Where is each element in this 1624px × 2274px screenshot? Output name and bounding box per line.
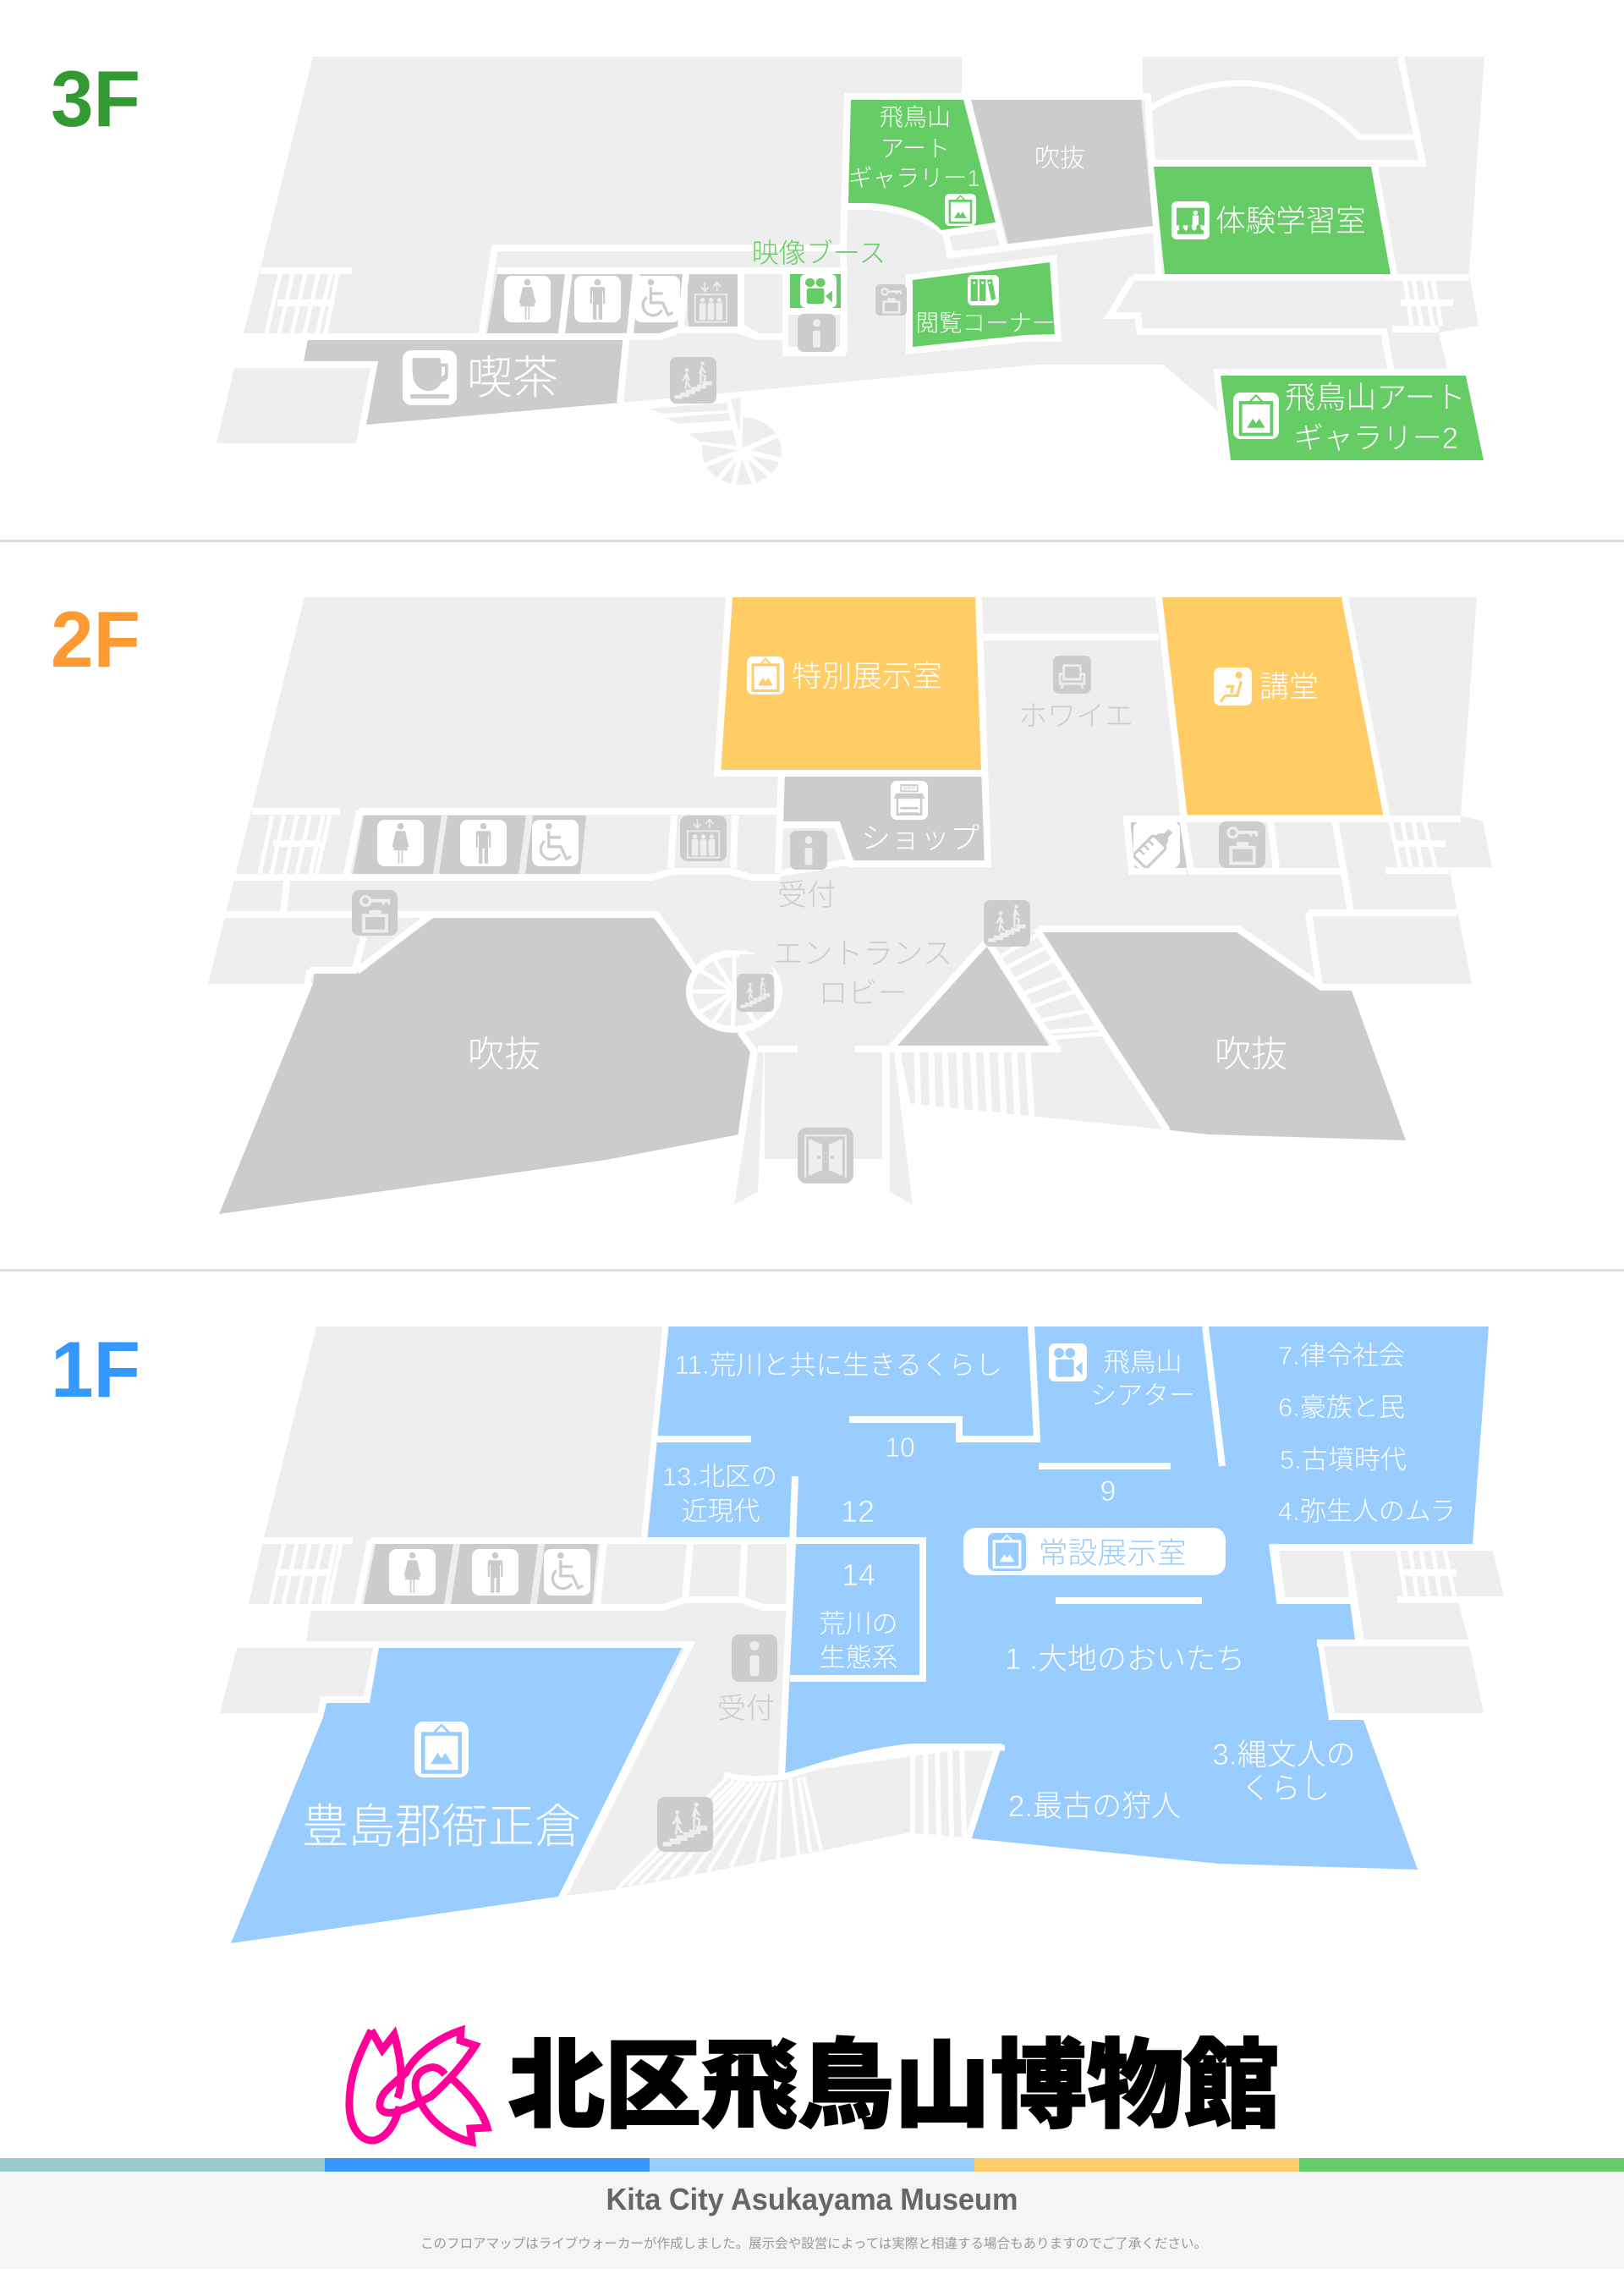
fan stairs 1F bbox=[617, 1746, 964, 1889]
floor label 2F: 2F bbox=[51, 595, 140, 684]
floor label 1F: 1F bbox=[51, 1325, 140, 1414]
room: gallery 1 bbox=[848, 100, 996, 230]
labels 1F: 1 .大地のおいたち bbox=[1005, 1643, 1245, 1676]
labels 1F: 5.古墳時代 bbox=[1280, 1445, 1407, 1475]
labels 2F: ロビー bbox=[818, 977, 908, 1010]
walls 3F bbox=[244, 57, 1469, 413]
labels 1F: 生態系 bbox=[819, 1643, 898, 1673]
floor plate 1F bbox=[249, 1326, 1002, 1896]
labels 3F: ギャラリー2 bbox=[1294, 422, 1458, 455]
logo: museum name: 北区飛鳥山博物館 bbox=[508, 2033, 1280, 2140]
video booth frame bbox=[786, 274, 844, 353]
labels 3F bbox=[467, 104, 1466, 455]
labels 1F: 4.弥生人のムラ bbox=[1278, 1497, 1456, 1526]
lower left room 3F bbox=[217, 368, 370, 443]
footer title: Kita City Asukayama Museum bbox=[606, 2182, 1018, 2216]
walls 1F bbox=[234, 1326, 1469, 1899]
right stairs 3F bbox=[1392, 280, 1453, 329]
labels 3F: 閲覧コーナー bbox=[915, 310, 1056, 336]
left room 1F bbox=[220, 1648, 373, 1713]
labels 2F: 受付 bbox=[777, 879, 837, 912]
panel: 3F floor map bbox=[51, 54, 1484, 491]
restroom rooms 3F bbox=[487, 274, 738, 333]
footer bbox=[0, 2172, 1624, 2269]
labels 1F: くらし bbox=[1241, 1772, 1330, 1805]
labels 1F: 14 bbox=[842, 1557, 875, 1592]
spiral stairs 3F bbox=[650, 398, 787, 491]
labels 3F: 映像ブース bbox=[752, 238, 886, 268]
labels 2F: 吹抜 bbox=[1215, 1035, 1287, 1075]
labels 2F: 特別展示室 bbox=[792, 659, 942, 693]
logo: cherry blossom emblem bbox=[349, 2030, 487, 2142]
atrium right 2F bbox=[1043, 932, 1406, 1140]
labels 1F: 近現代 bbox=[682, 1497, 760, 1526]
right rooms 1F bbox=[1279, 1551, 1504, 1713]
labels 1F: 11.荒川と共に生きるくらし bbox=[674, 1349, 1002, 1380]
divider bbox=[0, 1269, 1624, 1272]
icons 2F bbox=[352, 656, 1265, 1184]
room: special exhibition bbox=[721, 597, 981, 770]
labels 1F: 3.縄文人の bbox=[1212, 1738, 1356, 1771]
floor label 3F: 3F bbox=[51, 54, 140, 143]
labels 3F: ギャラリー1 bbox=[848, 165, 980, 191]
labels 3F: アート bbox=[881, 135, 950, 162]
labels 3F: 喫茶 bbox=[467, 353, 558, 404]
floor plate 2F bbox=[208, 597, 1492, 1159]
atrium 3F bbox=[971, 100, 1153, 244]
right stairs 2F bbox=[1391, 821, 1435, 867]
labels 1F: 7.律令社会 bbox=[1278, 1341, 1405, 1370]
labels 3F: 飛鳥山アート bbox=[1285, 380, 1466, 415]
icons 3F bbox=[403, 194, 1279, 439]
labels 3F: 飛鳥山 bbox=[880, 104, 951, 130]
spiral stairs 2F bbox=[689, 953, 779, 1030]
labels 2F bbox=[468, 659, 1319, 1075]
room: shop bbox=[783, 777, 985, 860]
left stairs 3F bbox=[266, 274, 337, 333]
footer note: このフロアマップはライブウォーカーが作成しました。展示会や設営によっては実際と相違する場合もありますのでご了承ください。 bbox=[420, 2235, 1207, 2251]
labels 1F: 6.豪族と民 bbox=[1278, 1392, 1405, 1422]
labels 2F: 講堂 bbox=[1259, 671, 1319, 704]
left stairs 2F bbox=[260, 816, 330, 874]
labels 2F: エントランス bbox=[773, 937, 952, 970]
restroom rooms 1F bbox=[364, 1544, 598, 1604]
permanent exhibition sign bbox=[963, 1528, 1226, 1575]
room: hands-on classroom bbox=[1154, 167, 1391, 274]
panel: 2F floor map bbox=[51, 595, 1492, 1214]
labels 1F: シアター bbox=[1090, 1381, 1195, 1410]
room: gallery 2 bbox=[1221, 376, 1484, 460]
entrance pillars bbox=[734, 1052, 913, 1205]
left stairs 1F bbox=[271, 1544, 341, 1604]
labels 2F: 吹抜 bbox=[468, 1035, 540, 1075]
labels 1F: 常設展示室 bbox=[1038, 1537, 1187, 1570]
labels 1F: 2.最古の狩人 bbox=[1008, 1790, 1181, 1823]
room: permanent exhibition bbox=[647, 1326, 1489, 1870]
labels 2F: ホワイエ bbox=[1018, 700, 1133, 733]
cafe room bbox=[304, 339, 627, 425]
floor plate 3F bbox=[244, 57, 1484, 411]
room: reading corner bbox=[913, 262, 1055, 347]
labels 1F: 受付 bbox=[717, 1693, 775, 1725]
central staircase 2F bbox=[897, 935, 1103, 1118]
labels 1F: 豊島郡衙正倉 bbox=[302, 1800, 581, 1853]
atrium triangle 2F bbox=[894, 947, 1049, 1046]
divider bbox=[0, 540, 1624, 542]
panel: 1F floor map bbox=[51, 1325, 1504, 1943]
labels 1F: 荒川の bbox=[819, 1609, 898, 1639]
atrium left 2F bbox=[219, 918, 754, 1214]
reading corner frame bbox=[906, 255, 1062, 354]
right stairs 1F bbox=[1398, 1551, 1455, 1596]
labels 1F bbox=[302, 1341, 1456, 1853]
labels 1F: 12 bbox=[841, 1494, 875, 1529]
room: Toshima storehouse bbox=[231, 1648, 682, 1943]
walls 2F bbox=[225, 597, 1461, 1201]
labels 2F: ショップ bbox=[861, 822, 979, 855]
labels 3F: 体験学習室 bbox=[1215, 204, 1366, 238]
labels 1F: 13.北区の bbox=[662, 1462, 777, 1491]
labels 3F: 吹抜 bbox=[1034, 145, 1085, 173]
labels 1F: 9 bbox=[1100, 1475, 1116, 1508]
icons 1F bbox=[389, 1343, 1087, 1852]
labels 1F: 飛鳥山 bbox=[1103, 1348, 1182, 1377]
colour band bbox=[0, 2158, 1624, 2172]
room: auditorium bbox=[1162, 597, 1385, 815]
restroom rooms 2F bbox=[353, 816, 1187, 874]
labels 1F: 10 bbox=[885, 1432, 915, 1463]
